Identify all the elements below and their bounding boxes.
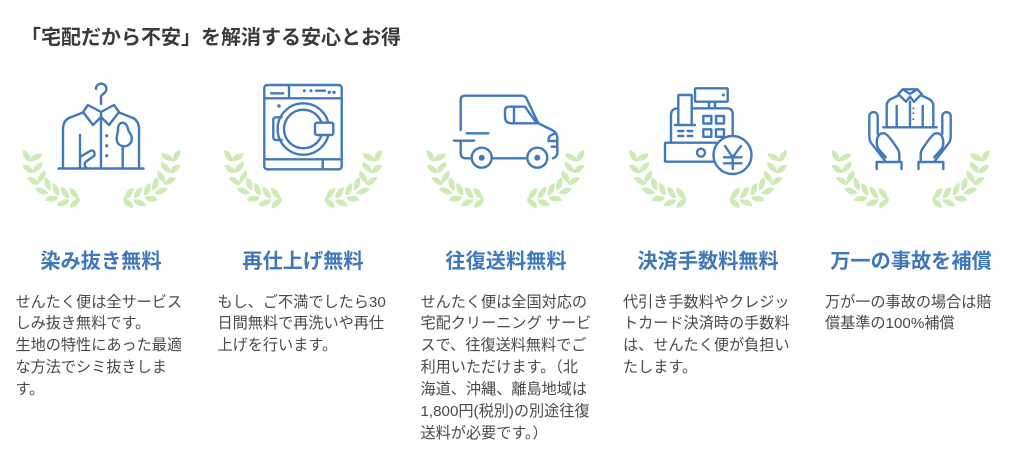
panel: free re-finish [218, 84, 386, 354]
text: 海道、沖縄、離島地域は [420, 381, 587, 398]
text: もし、ご不満でしたら30 [218, 294, 386, 310]
heading: 万一の事故を補償 [830, 250, 992, 272]
text: 償基準の100%補償 [825, 315, 955, 332]
text: 宅配クリーニング サービ [420, 315, 591, 332]
text: 日間無料で再洗いや再仕 [218, 315, 384, 332]
heading: 往復送料無料 [445, 250, 567, 272]
text: たします。 [623, 359, 697, 376]
text: スで、往復送料無料でご [420, 337, 586, 354]
title: 「宅配だから不安」を解消する安心とお得 [21, 26, 401, 48]
text: 万が一の事故の場合は賠 [825, 294, 992, 310]
text [623, 294, 790, 376]
icon: washing machine with laurel [224, 84, 382, 208]
icon: shirt on hanger with laurel [22, 82, 181, 208]
text [16, 294, 182, 398]
text [825, 294, 992, 332]
panel: free round-trip shipping [420, 94, 591, 442]
heading: 決済手数料無料 [637, 250, 779, 272]
text: な方法でシミ抜きしま [16, 359, 167, 376]
panel: free payment fees [623, 87, 790, 376]
text: せんたく便は全サービス [16, 294, 182, 310]
text: 利用いただけます。（北 [420, 359, 578, 376]
text: 生地の特性にあった最適 [16, 337, 182, 354]
text: せんたく便は全国対応の [420, 294, 587, 310]
heading: 再仕上げ無料 [242, 250, 364, 272]
text: 送料が必要です。） [420, 425, 548, 442]
icon: delivery van with laurel [426, 94, 585, 208]
text: トカード決済時の手数料 [623, 315, 790, 332]
text [218, 294, 386, 354]
heading: 染み抜き無料 [40, 250, 162, 272]
text [420, 294, 591, 442]
text: は、せんたく便が負担い [623, 337, 790, 354]
icon: cash register with yen and laurel [629, 87, 788, 208]
icon: hands holding shirt with laurel [831, 88, 990, 208]
text: 上げを行います。 [218, 337, 337, 354]
panel: accident compensation [825, 88, 992, 332]
text: 1,800円(税別)の別途往復 [420, 403, 590, 420]
text: しみ抜き無料です。 [16, 315, 150, 332]
text: す。 [16, 381, 44, 398]
panel: stain removal [16, 82, 182, 398]
text: 代引き手数料やクレジッ [623, 294, 790, 310]
